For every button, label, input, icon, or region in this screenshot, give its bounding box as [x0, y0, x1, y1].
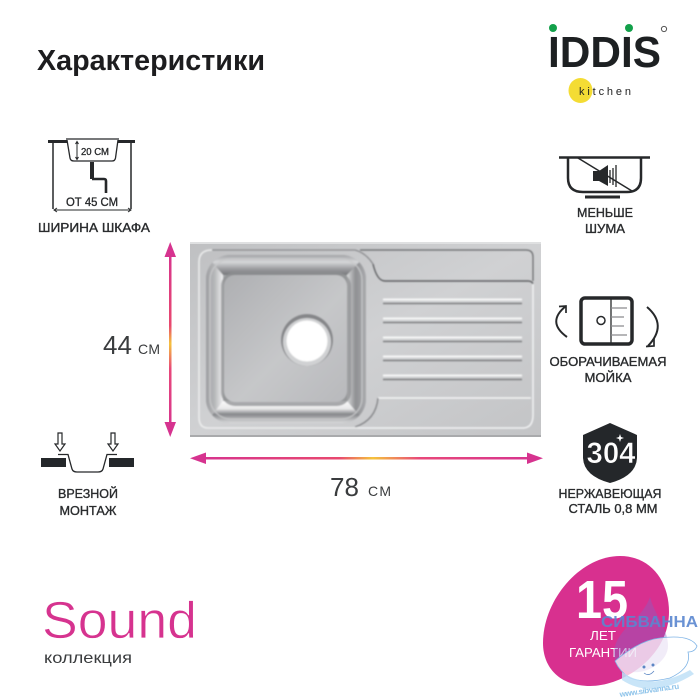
collection name: Sound: [42, 592, 197, 650]
dimension: 78 cm: 78: [330, 472, 359, 502]
watermark: sibvanna: www.sibvanna.ru: [618, 682, 680, 699]
label: 20 cm: 20 СМ: [81, 147, 109, 158]
sink photo: [190, 242, 541, 437]
label: from 45 cm: ОТ 45 СМ: [66, 197, 118, 209]
icon: 304 steel shield: [583, 423, 637, 483]
label: less noise: ШУМА: [585, 221, 625, 236]
logo: iddis kitchen: IDDIS: [548, 28, 661, 77]
label: cabinet width: ШИРИНА ШКАФА: [38, 220, 150, 235]
label: flush mount: МОНТАЖ: [60, 503, 117, 518]
logo: iddis kitchen: kitchen: [579, 86, 631, 98]
icon: 304 steel shield: 304: [586, 437, 636, 470]
dimension: 78 cm: СМ: [368, 483, 391, 499]
basin walls: [206, 255, 366, 423]
icon: flush mount: [41, 433, 134, 472]
badge: 15 year warranty: [543, 556, 669, 686]
badge: 15 year warranty: ЛЕТ: [590, 628, 616, 643]
watermark: sibvanna: [601, 597, 698, 699]
dimension: 44 cm: [103, 330, 160, 360]
badge: 15 year warranty: ГАРАНТИИ: [569, 645, 637, 660]
label: reversible sink: [550, 354, 666, 385]
dimension: 78 cm: [330, 472, 391, 502]
badge: 15 year warranty: 15: [576, 570, 628, 630]
label: flush mount: [58, 486, 118, 518]
label: stainless steel: [558, 486, 662, 516]
label: less noise: [577, 205, 633, 236]
icon: reversible sink: [556, 298, 658, 346]
label: stainless steel: НЕРЖАВЕЮЩАЯ: [558, 486, 662, 501]
label: reversible sink: МОЙКА: [584, 370, 632, 385]
label: less noise: МЕНЬШЕ: [577, 205, 633, 220]
arrow: height: [164, 242, 176, 437]
icon: cabinet width: [48, 139, 135, 212]
logo: iddis kitchen: [548, 24, 667, 103]
dimension: 44 cm: СМ: [138, 341, 160, 357]
label: stainless steel: СТАЛЬ 0,8 ММ: [568, 501, 658, 516]
icon: less noise: [559, 158, 650, 197]
label: reversible sink: ОБОРАЧИВАЕМАЯ: [550, 354, 666, 369]
label: flush mount: ВРЕЗНОЙ: [58, 486, 118, 501]
dimension: 44 cm: 44: [103, 330, 132, 360]
caption: collection: коллекция: [44, 650, 132, 667]
arrow: width: [190, 452, 543, 464]
title: Характеристики: [37, 45, 265, 77]
watermark: sibvanna: СИБВАННА: [601, 614, 698, 631]
